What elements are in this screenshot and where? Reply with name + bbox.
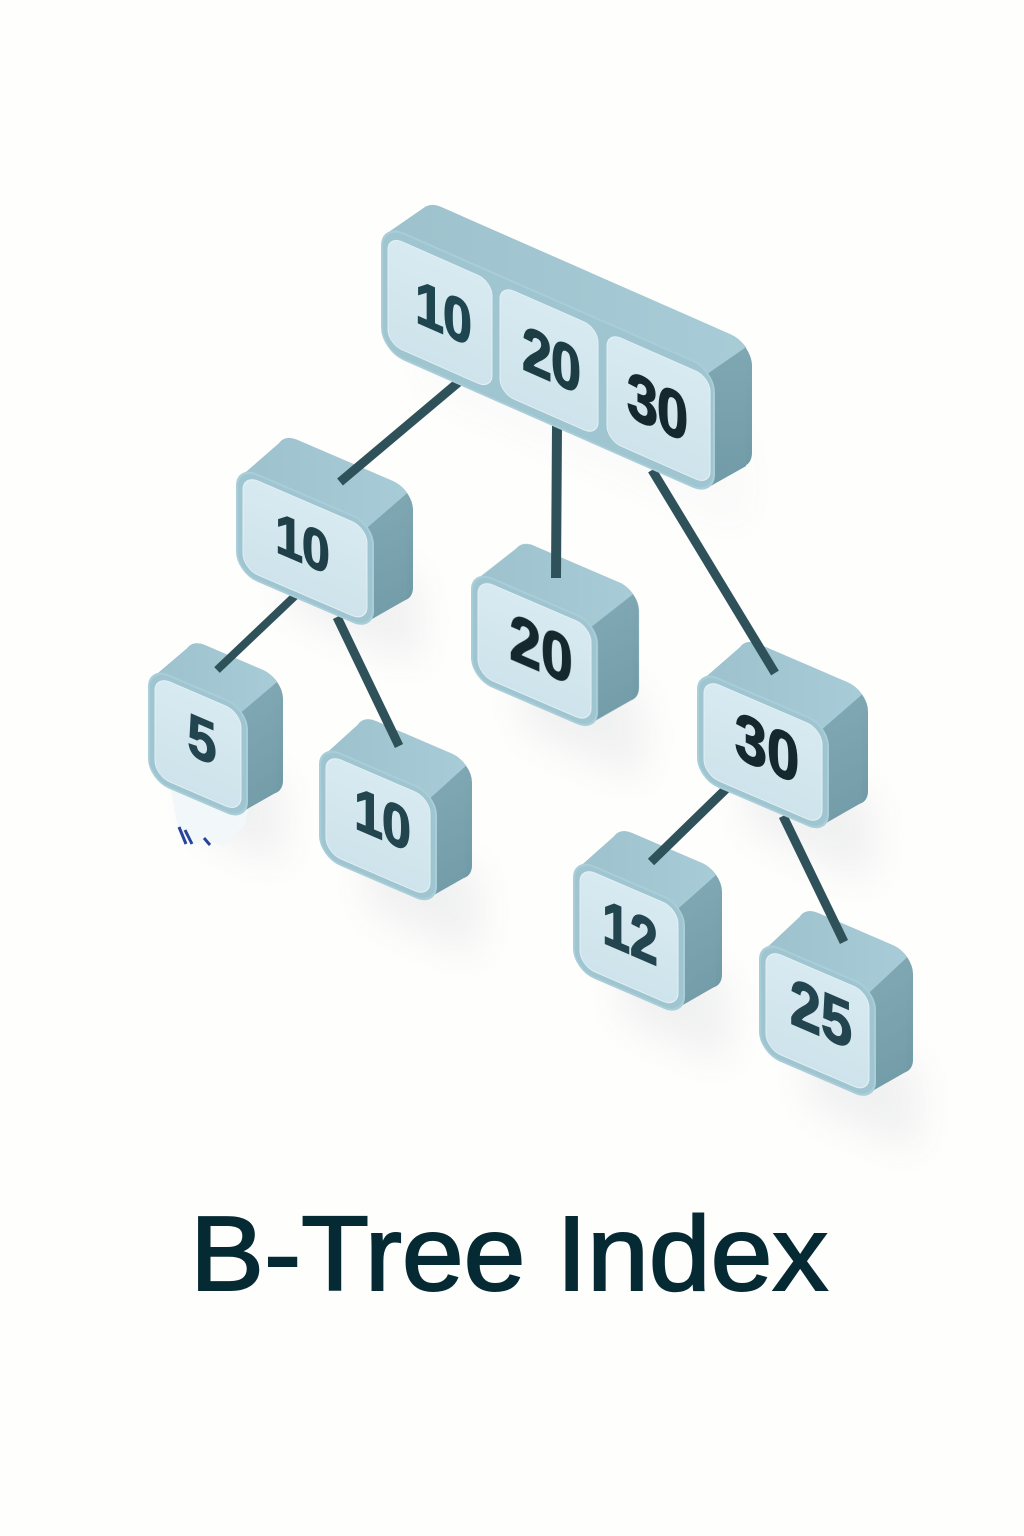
connector: root to node 20 (556, 425, 557, 578)
leaf node 10: 10 (354, 774, 410, 865)
title: B-Tree Index (190, 1195, 828, 1313)
internal node 10: 10 (275, 499, 329, 587)
key cell 10 (388, 236, 492, 389)
internal node 20 (472, 519, 639, 750)
internal node 30 (698, 618, 868, 851)
internal node 30: 30 (735, 696, 799, 799)
leaf node 12: 12 (602, 887, 658, 980)
key cell 30: 30 (627, 357, 687, 457)
connector: node 30 to leaf 12 (651, 788, 727, 862)
internal node 10 (237, 414, 413, 648)
root node with keys 10, 20, 30 (382, 181, 752, 513)
connector: node 30 to leaf 25 (783, 816, 844, 942)
connector: node 10 to leaf 10 (337, 617, 399, 746)
leaf node 12 (574, 808, 722, 1033)
leaf node 5 (149, 621, 283, 837)
leaf node 5: 5 (188, 700, 216, 779)
leaf node 10 (320, 697, 472, 921)
torn paper artifact under node 5 (168, 775, 250, 846)
key cell 20: 20 (522, 312, 580, 409)
key cell 30 (607, 332, 710, 485)
leaf node 25 (760, 888, 913, 1118)
key cell 20 (500, 285, 598, 436)
internal node 20: 20 (509, 598, 573, 700)
connector: root to node 30 (652, 470, 775, 673)
leaf node 25: 25 (790, 964, 852, 1064)
connector: root to node 10 (340, 381, 460, 482)
connector: node 10 to leaf 5 (217, 595, 296, 670)
key cell 10: 10 (415, 266, 471, 360)
